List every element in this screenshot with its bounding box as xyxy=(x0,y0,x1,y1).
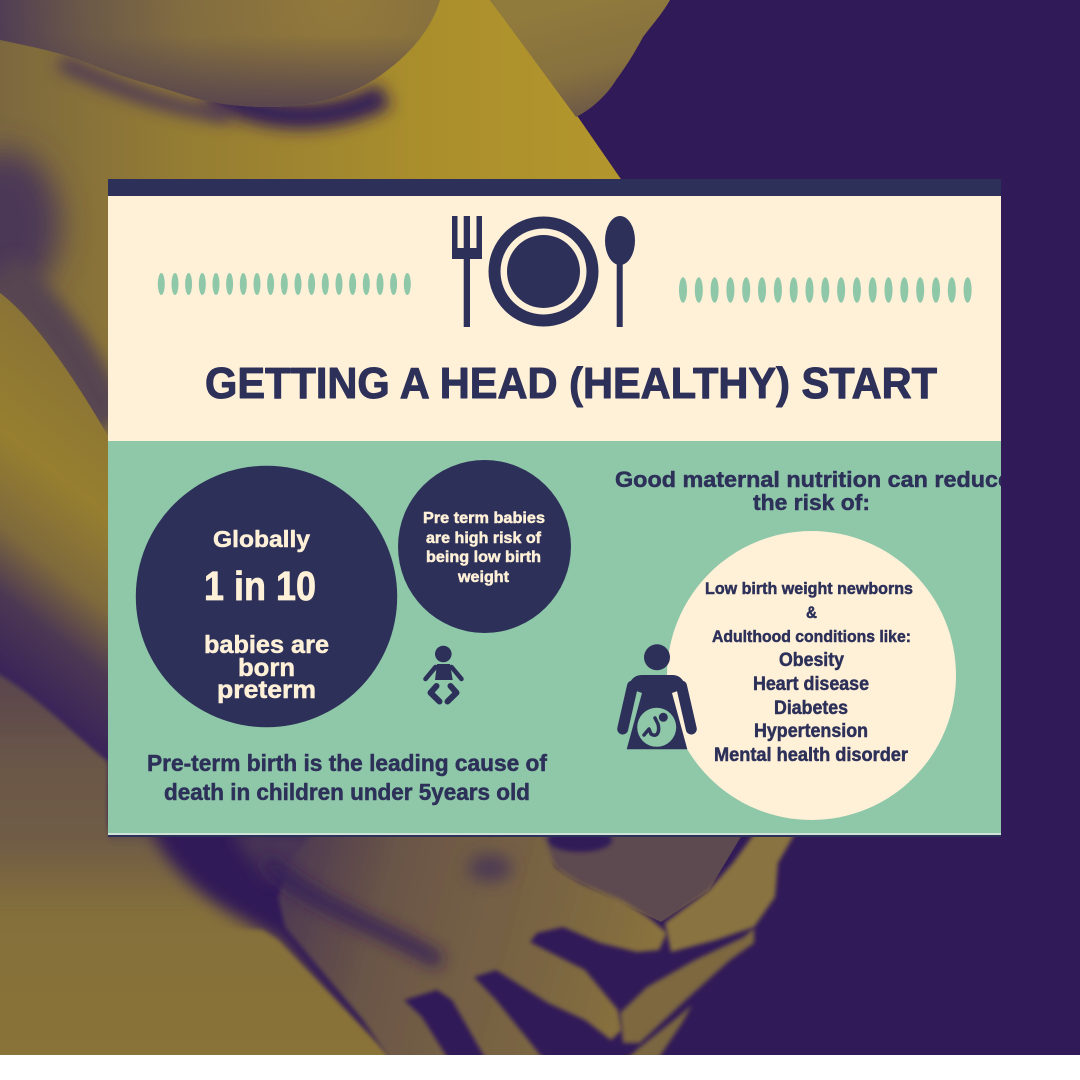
cream circle: risks list: Mental health disorder xyxy=(714,745,909,766)
cream circle: risks list: & xyxy=(806,603,817,622)
top navy bar xyxy=(108,179,1001,196)
large circle: globally 1 in 10: Globally xyxy=(213,526,310,552)
small circle: pre term babies: are high risk of xyxy=(426,530,542,547)
heading: good maternal nutrition: Good maternal nutrition can reduce xyxy=(615,467,1011,492)
large circle: globally 1 in 10: born xyxy=(238,654,295,682)
small circle: pre term babies: Pre term babies xyxy=(423,510,545,527)
small circle: pre term babies xyxy=(398,460,571,633)
large circle: globally 1 in 10: babies are xyxy=(204,631,329,659)
infographic card xyxy=(108,179,1011,837)
small circle: pre term babies: weight xyxy=(457,569,509,586)
decorative dots left xyxy=(158,273,411,295)
cream circle: risks list: Hypertension xyxy=(754,721,868,742)
cream header panel xyxy=(108,196,1001,441)
title: GETTING A HEAD (HEALTHY) START xyxy=(205,359,937,408)
white strip below photo xyxy=(0,1055,1080,1080)
icon: pregnant woman xyxy=(623,644,691,749)
text: pre-term birth leading cause xyxy=(147,750,547,805)
cream circle: risks list: Diabetes xyxy=(774,698,848,719)
cream circle: risks list: Obesity xyxy=(779,650,844,671)
large circle: globally 1 in 10: preterm xyxy=(217,676,316,704)
icon: fork, plate and spoon xyxy=(452,216,635,327)
text: pre-term birth leading cause: death in children under 5years old xyxy=(164,779,530,805)
cream circle: risks list xyxy=(667,531,956,820)
text: pre-term birth leading cause: Pre-term birth is the leading cause of xyxy=(147,750,547,776)
heading: good maternal nutrition xyxy=(616,470,1001,510)
large circle: globally 1 in 10: 1 in 10 xyxy=(204,563,316,609)
icon: baby xyxy=(426,646,462,702)
card bottom edge xyxy=(108,833,1001,837)
green content panel xyxy=(108,441,1001,833)
cream circle: risks list: Heart disease xyxy=(753,674,869,695)
decorative dots right xyxy=(679,277,972,303)
large circle: globally 1 in 10 xyxy=(136,466,397,727)
cream circle: risks list: Low birth weight newborns xyxy=(705,579,913,598)
small circle: pre term babies: being low birth xyxy=(426,549,541,566)
cream circle: risks list: Adulthood conditions like: xyxy=(712,627,911,646)
heading: good maternal nutrition: the risk of: xyxy=(753,490,870,515)
